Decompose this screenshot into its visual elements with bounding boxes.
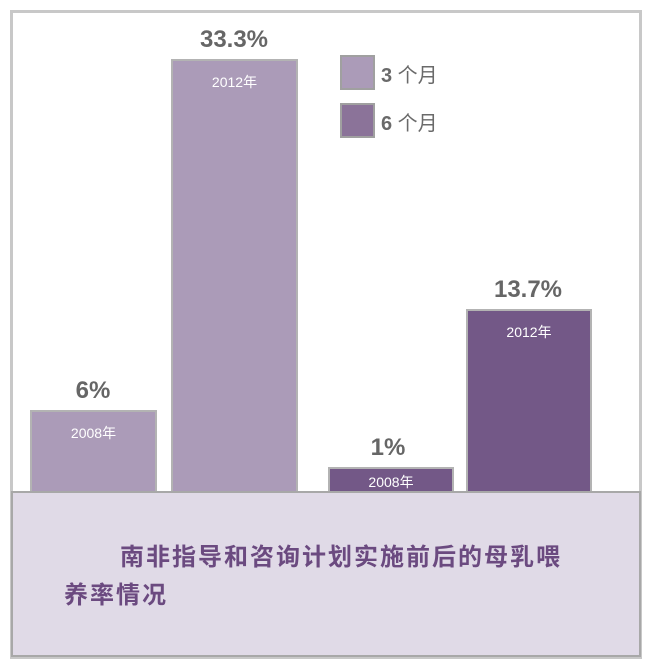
bar: 6 months 2008 — [328, 467, 454, 492]
legend: 3 months — [340, 55, 438, 90]
bar: 3 months 2008 — [30, 410, 157, 492]
legend: 6 months: 6 个月 — [381, 113, 438, 135]
legend — [340, 55, 438, 138]
caption text: 南非指导和咨询计划实施前后的母乳喂 — [120, 544, 562, 571]
caption text: 养率情况 — [64, 582, 168, 609]
bar: 6 months 2012 — [466, 309, 592, 492]
label: 1%: 1% — [371, 434, 405, 461]
label: 13.7%: 13.7% — [494, 276, 562, 303]
bar: 6 months 2008: 2008年 — [368, 474, 414, 490]
legend: 6 months — [340, 103, 438, 138]
bar: 3 months 2012 — [171, 59, 298, 492]
label: 33.3%: 33.3% — [200, 26, 268, 53]
bar: 3 months 2012: 2012年 — [212, 74, 257, 90]
bar: 6 months 2012: 2012年 — [506, 324, 552, 340]
bar: 3 months 2008: 2008年 — [71, 425, 116, 441]
caption panel — [11, 491, 641, 657]
label: 6%: 6% — [76, 377, 110, 404]
caption text — [64, 544, 562, 609]
legend: 3 months: 3 个月 — [381, 65, 438, 87]
